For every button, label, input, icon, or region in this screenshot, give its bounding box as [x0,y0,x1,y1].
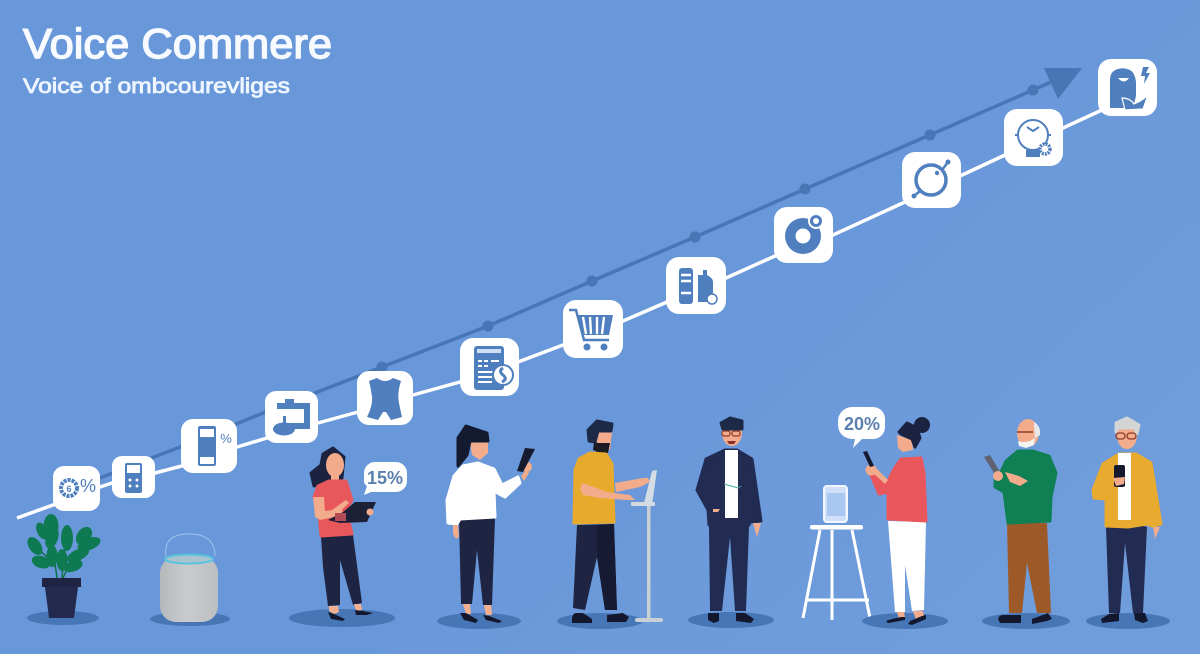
person: man in dark suit [688,418,774,628]
icon: bag with bolt [1098,59,1157,116]
person: woman with bun and phone [838,407,948,629]
icon: clock and gear [1004,109,1063,166]
white trend line [17,110,1102,518]
subtitle: Voice of ombcourevliges [23,75,290,98]
dark trend line with arrow [100,68,1082,478]
speech bubble: 20% [838,407,885,448]
kiosk stand [631,470,663,622]
plant [24,514,102,625]
speech bubble: 20%: 20% [844,414,880,434]
person: bearded man at kiosk [557,421,663,629]
icon: gear percent [53,466,100,511]
icon: gear percent: 6 [66,484,72,494]
icon: gear percent: % [80,476,96,496]
icon: garment [357,371,413,425]
speech bubble: 15% [364,462,407,495]
person: older woman in yellow cardigan [1086,418,1170,629]
icon: phone percent: % [220,431,232,446]
icon: receipt with coin [460,338,519,396]
icon: ring with axis [902,152,961,208]
icon: donut [774,207,833,263]
icon: phone percent [181,419,237,473]
icon: calculator device [112,456,155,498]
person: woman with tablet [289,448,407,627]
speech bubble: 15%: 15% [367,468,403,488]
icon: can and bottle [666,257,726,314]
icon: shopping cart [563,300,623,358]
stool with smart display [803,486,870,620]
smart speaker [150,534,230,626]
person: woman in white with phone [437,426,535,629]
person: older man in green [982,419,1070,629]
title: Voice Commere [23,20,332,67]
icon: box and fruit [265,391,318,443]
